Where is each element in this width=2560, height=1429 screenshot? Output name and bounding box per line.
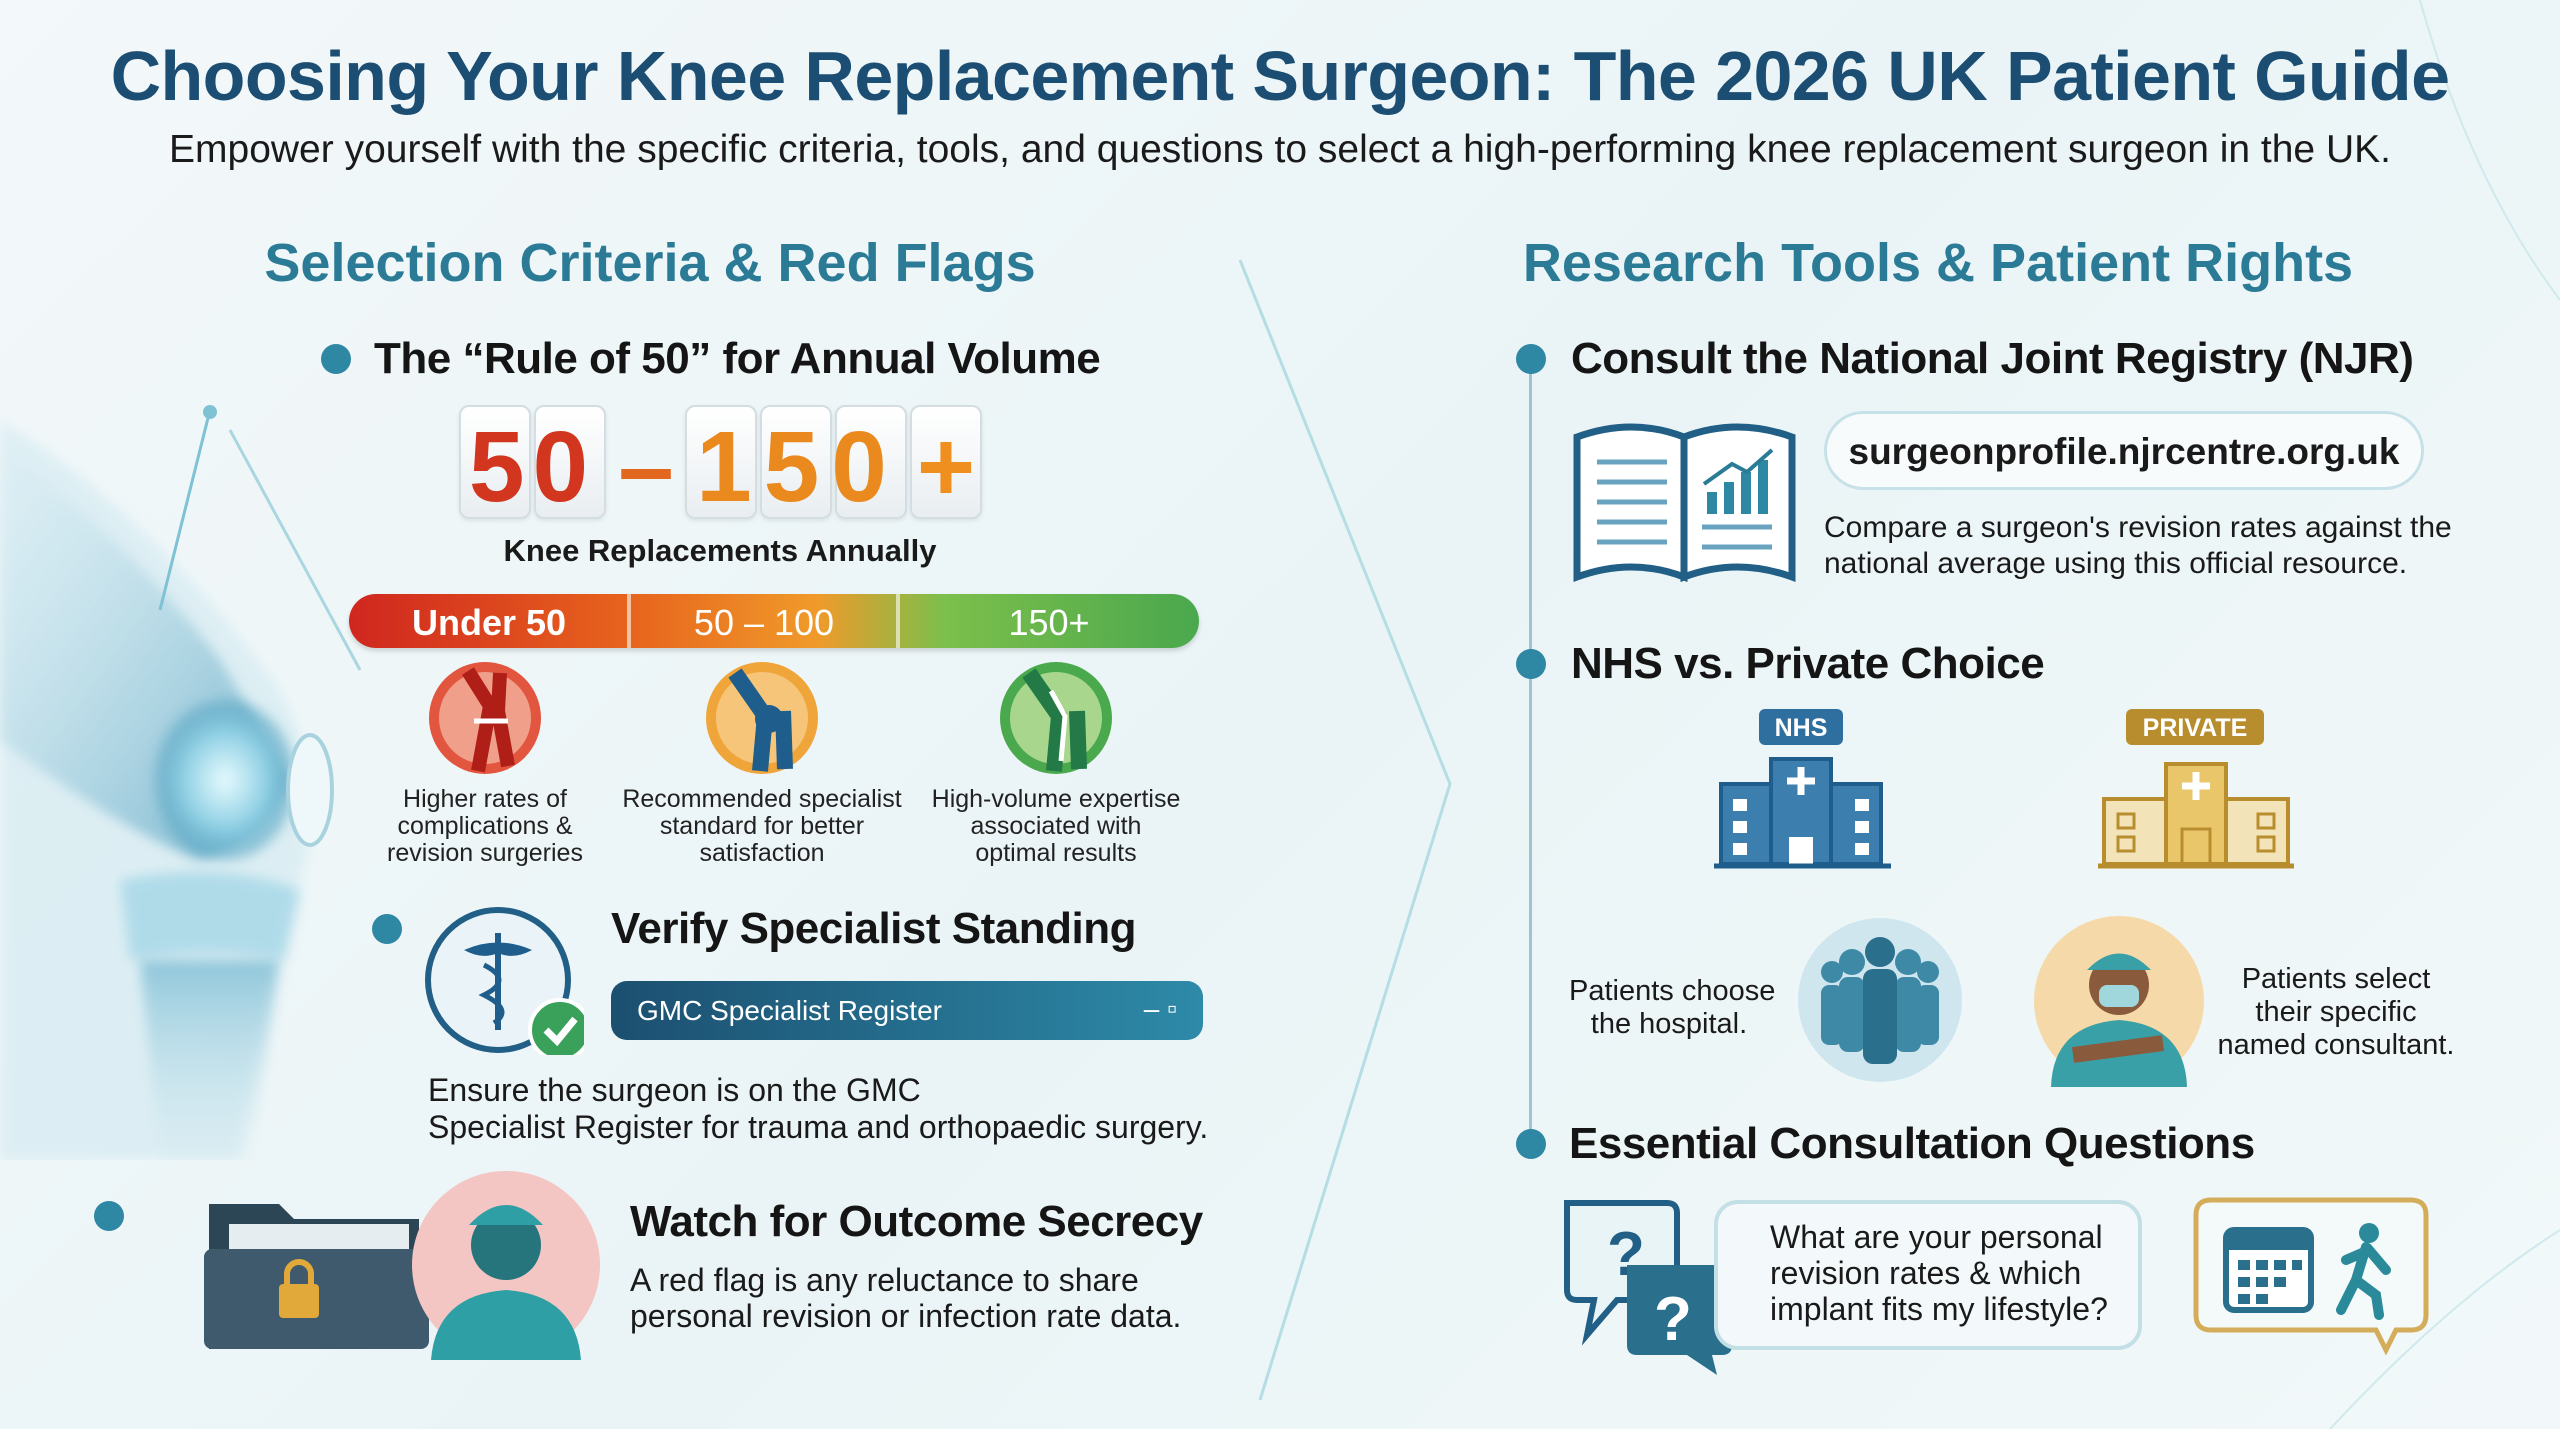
text: question — [1770, 1219, 2108, 1327]
text: patients select consultant: named consultant. — [2218, 1029, 2454, 1061]
number display 50-150+: 50 — [469, 411, 596, 523]
label: knee replacements annually: Knee Replacements Annually — [504, 533, 936, 568]
volume bar: 50 – 100 — [694, 602, 834, 643]
text: red flag: A red flag is any reluctance to share — [630, 1262, 1139, 1298]
text: patients choose hospital: the hospital. — [1591, 1008, 1747, 1040]
icon: consultant — [2034, 916, 2204, 1087]
icon: calendar and runner — [2194, 1198, 2428, 1355]
icon: question bubbles: ? — [1654, 1285, 1692, 1354]
text: compare — [1824, 511, 2452, 580]
text: patients select consultant — [2218, 963, 2454, 1061]
caption: under 50: complications & — [397, 812, 573, 840]
text: ensure: Specialist Register for trauma and orthopaedic surgery. — [428, 1109, 1208, 1145]
text: patients select consultant: Patients select — [2242, 963, 2430, 995]
icon: question bubbles — [1564, 1200, 1732, 1375]
bullet — [1516, 649, 1546, 679]
heading: questions: Essential Consultation Questions — [1569, 1119, 2255, 1168]
url pill — [1824, 411, 2424, 490]
url pill: surgeonprofile.njrcentre.org.uk — [1848, 431, 2399, 472]
heading: secrecy: Watch for Outcome Secrecy — [630, 1197, 1203, 1246]
text: question: implant fits my lifestyle? — [1770, 1291, 2108, 1327]
caption: under 50 — [387, 785, 583, 867]
caption: 150+ — [932, 785, 1180, 867]
number display 50-150+: – — [618, 411, 674, 523]
icon: question bubbles: ? — [1607, 1220, 1645, 1289]
icon: locked folder — [204, 1204, 429, 1349]
text: ensure: Ensure the surgeon is on the GMC — [428, 1072, 921, 1108]
text: compare: Compare a surgeon's revision rates against the — [1824, 511, 2452, 544]
bullet — [94, 1201, 124, 1231]
caption: under 50: revision surgeries — [387, 839, 583, 867]
text: compare: national average using this official resource. — [1824, 547, 2407, 580]
PRIVATE badge + building — [2098, 709, 2294, 868]
subtitle: Empower yourself with the specific criteria, tools, and questions to select a high-performing knee replacement surgeon in the UK. — [169, 128, 2391, 171]
text: question: What are your personal — [1770, 1219, 2103, 1255]
number display 50-150+: 150 — [696, 411, 899, 523]
text: ensure — [428, 1072, 1208, 1145]
heading: NJR: Consult the National Joint Registry (NJR) — [1571, 334, 2413, 383]
caption: 150+: optimal results — [975, 839, 1137, 867]
heading: selection criteria: Selection Criteria & Red Flags — [264, 233, 1036, 293]
bullet — [1516, 1129, 1546, 1159]
caption: under 50: Higher rates of — [403, 785, 567, 813]
caption: 150+: High-volume expertise — [932, 785, 1180, 813]
panel: verify specialist — [372, 904, 1208, 1145]
icon: caduceus — [425, 907, 584, 1055]
PRIVATE badge + building: PRIVATE — [2143, 714, 2247, 742]
text: red flag: personal revision or infection rate data. — [630, 1298, 1181, 1334]
heading: research tools: Research Tools & Patient Rights — [1523, 233, 2353, 293]
bullet — [372, 914, 402, 944]
icon: green knee — [1000, 662, 1112, 774]
caption: 50-100: satisfaction — [699, 839, 825, 867]
text: question: revision rates & which — [1770, 1255, 2081, 1291]
volume bar: 150+ — [1008, 602, 1090, 643]
panel: NJR — [1516, 334, 2452, 582]
number display 50-150+ — [458, 405, 982, 523]
GMC register bar: – ▫ — [1144, 993, 1177, 1024]
question bubble — [1714, 1200, 2142, 1350]
text: patients choose hospital — [1569, 975, 1775, 1040]
icon: red knee — [429, 662, 541, 774]
bullet — [321, 344, 351, 374]
caption: 150+: associated with — [971, 812, 1141, 840]
GMC register bar — [611, 981, 1203, 1040]
text: patients select consultant: their specific — [2255, 996, 2417, 1028]
GMC register bar: GMC Specialist Register — [637, 995, 942, 1026]
text: patients choose hospital: Patients choose — [1569, 975, 1775, 1007]
icon: staff group — [1798, 918, 1962, 1082]
icon: surgeon — [412, 1171, 600, 1360]
title: Choosing Your Knee Replacement Surgeon: The 2026 UK Patient Guide — [111, 37, 2449, 115]
text: red flag — [630, 1262, 1181, 1334]
NHS badge + building — [1714, 709, 1891, 868]
panel: rule of 50 — [321, 334, 1100, 383]
heading: rule of 50: The “Rule of 50” for Annual Volume — [374, 334, 1100, 383]
knee illustration — [0, 405, 362, 1160]
bullet — [1516, 344, 1546, 374]
icon: book with chart — [1574, 424, 1796, 582]
number display 50-150+: + — [917, 411, 975, 523]
timeline line — [1529, 360, 1532, 1145]
volume bar — [349, 594, 1199, 648]
caption: 50-100: standard for better — [660, 812, 864, 840]
panel: NHS vs private — [1516, 639, 2454, 1087]
caption: 50-100 — [622, 785, 902, 867]
volume bar: Under 50 — [412, 602, 566, 643]
panel: consultation questions — [1516, 1119, 2428, 1375]
NHS badge + building: NHS — [1775, 714, 1827, 742]
panel: outcome secrecy — [94, 1171, 1203, 1360]
heading: NHS vs private: NHS vs. Private Choice — [1571, 639, 2044, 688]
icon: orange knee — [706, 662, 818, 774]
caption: 50-100: Recommended specialist — [622, 785, 902, 813]
heading: verify: Verify Specialist Standing — [611, 904, 1136, 953]
